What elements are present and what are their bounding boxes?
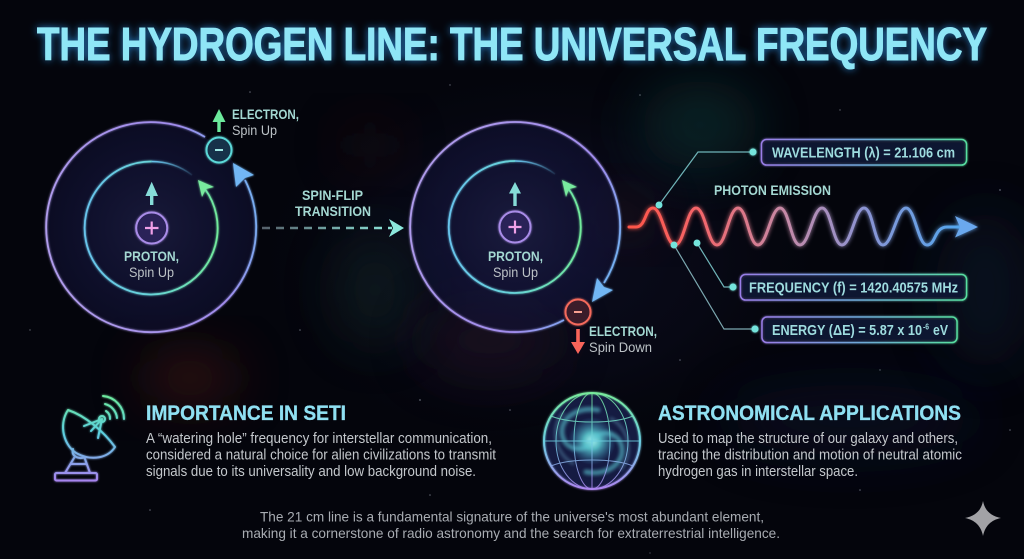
electron spin arrow up bbox=[212, 109, 226, 132]
photon emission label: PHOTON EMISSION bbox=[714, 182, 831, 198]
electron spin down bbox=[566, 300, 590, 324]
heading: astronomical applications: ASTRONOMICAL APPLICATIONS bbox=[658, 402, 961, 425]
proton label bbox=[124, 248, 179, 280]
proton spin arrow bbox=[509, 182, 521, 206]
text: SETI description bbox=[146, 431, 496, 480]
proton label bbox=[488, 248, 543, 280]
icon: galaxy globe bbox=[544, 393, 640, 489]
value box: frequency: FREQUENCY (f) = 1420.40575 MHz bbox=[749, 280, 958, 296]
proton spin arrow bbox=[145, 182, 158, 205]
text: astronomy description: hydrogen gas in interstellar space. bbox=[658, 464, 858, 480]
inner orbit with arrow bbox=[449, 161, 581, 293]
electron spin arrow down bbox=[571, 329, 585, 354]
diagram: atom with electron spin down bbox=[410, 122, 657, 355]
proton nucleus bbox=[500, 212, 530, 242]
value box: wavelength: WAVELENGTH (λ) = 21.106 cm bbox=[772, 144, 955, 162]
connector: wavelength bbox=[656, 148, 756, 208]
proton label: PROTON, bbox=[488, 248, 543, 264]
footer text: making it a cornerstone of radio astronomy and the search for extraterrestrial intelligence. bbox=[242, 525, 780, 541]
text: SETI description: signals due to its universality and low background noise. bbox=[146, 464, 476, 480]
value box: frequency bbox=[740, 274, 966, 300]
value box: energy: -6 bbox=[923, 322, 929, 332]
value box: energy: ENERGY (ΔE) = 5.87 x 10 bbox=[772, 322, 922, 339]
value box: energy bbox=[762, 317, 957, 342]
outer orbit with arrow bbox=[410, 122, 620, 332]
icon: sparkle star bbox=[965, 501, 1001, 536]
transition label: SPIN-FLIP bbox=[302, 187, 363, 203]
value box: energy: eV bbox=[933, 322, 948, 339]
connector: energy bbox=[670, 242, 758, 332]
text: astronomy description bbox=[658, 431, 962, 480]
spin-flip transition arrow bbox=[262, 187, 404, 237]
electron label: ELECTRON, bbox=[232, 106, 299, 122]
electron label bbox=[589, 323, 657, 355]
outer orbit with arrow bbox=[46, 122, 256, 332]
transition label bbox=[295, 187, 371, 219]
icon: satellite dish bbox=[55, 396, 124, 480]
text: SETI description: A “watering hole” frequency for interstellar communication, bbox=[146, 431, 492, 447]
electron label: Spin Up bbox=[232, 122, 277, 138]
text: astronomy description: Used to map the structure of our galaxy and others, bbox=[658, 431, 958, 447]
proton label: Spin Up bbox=[493, 264, 538, 280]
electron label: Spin Down bbox=[589, 339, 652, 355]
electron label: ELECTRON, bbox=[589, 323, 657, 339]
footer text: The 21 cm line is a fundamental signature of the universe's most abundant element, bbox=[260, 508, 764, 524]
heading: importance in SETI: IMPORTANCE IN SETI bbox=[146, 402, 346, 425]
proton nucleus bbox=[136, 212, 167, 244]
text: SETI description: considered a natural choice for alien civilizations to transmit bbox=[146, 448, 496, 464]
proton label: Spin Up bbox=[129, 264, 174, 280]
value box: wavelength bbox=[762, 140, 966, 165]
globe grid bbox=[544, 393, 640, 489]
proton label: PROTON, bbox=[124, 248, 179, 264]
footer text bbox=[242, 508, 780, 541]
diagram: atom with electron spin up bbox=[46, 106, 299, 333]
electron label bbox=[232, 106, 299, 138]
transition label: TRANSITION bbox=[295, 203, 371, 219]
inner orbit with arrow bbox=[85, 161, 218, 294]
photon wave with arrow bbox=[629, 208, 978, 245]
electron spin up bbox=[206, 138, 232, 162]
connector: frequency bbox=[694, 240, 736, 290]
text: astronomy description: tracing the distribution and motion of neutral atomic bbox=[658, 448, 962, 464]
